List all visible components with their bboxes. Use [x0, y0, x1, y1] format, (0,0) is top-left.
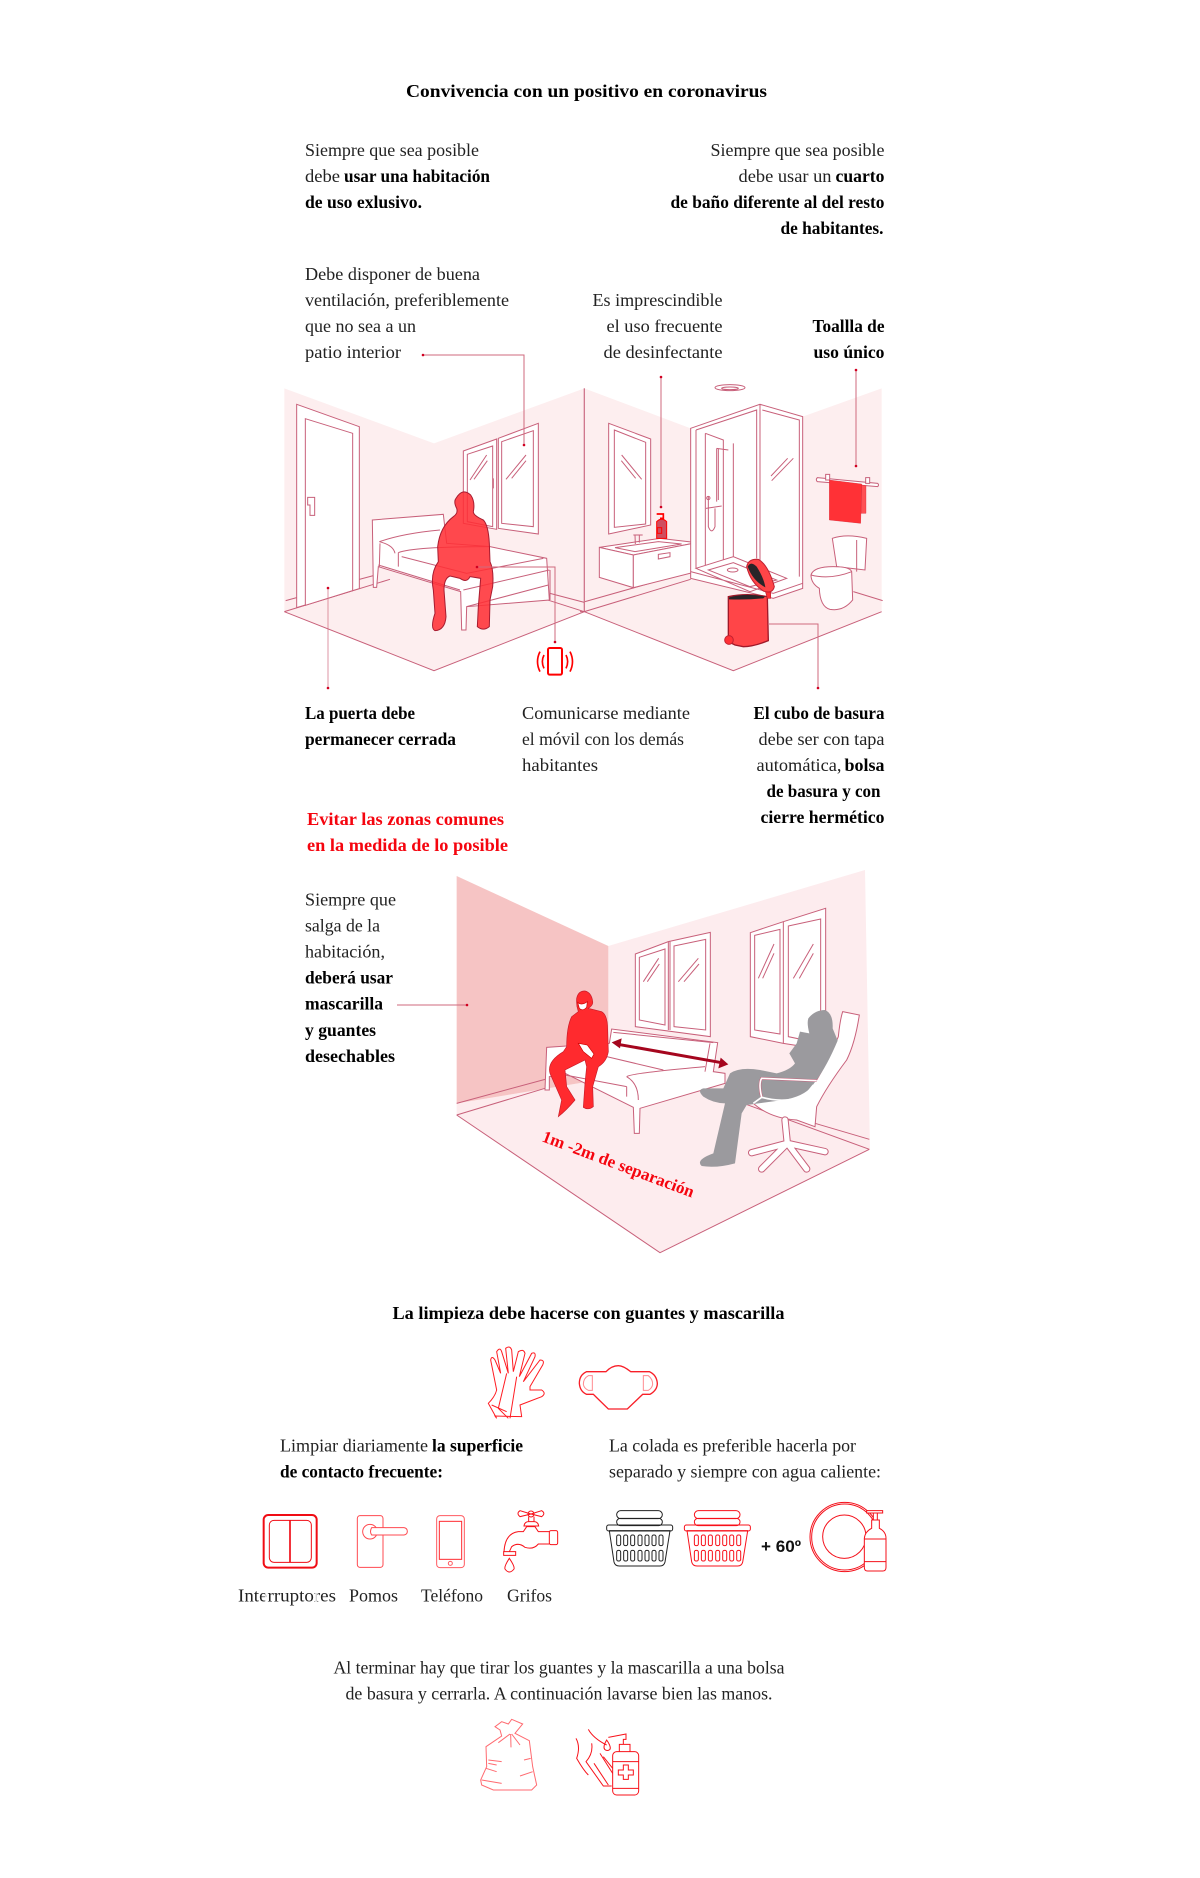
text: mascarilla y guantes: desechables: [305, 1046, 395, 1066]
leader: mascarilla: [397, 1004, 468, 1006]
leader: puerta: [327, 587, 329, 689]
leader: desinfectante: [660, 376, 662, 508]
text: 60 degrees: + 60º: [761, 1537, 801, 1556]
text: puerta cerrada: permanecer cerrada: [305, 729, 456, 749]
text: habitación de uso exclusivo: Siempre que sea posible: [305, 140, 479, 160]
text: colada: La colada es preferible hacerla por: [609, 1436, 856, 1456]
soap bottle: [657, 514, 667, 538]
text: cubo de basura: automática,: [756, 755, 842, 775]
towel rail and towel: [816, 474, 878, 523]
icon: plate and dish soap: [810, 1502, 886, 1572]
text: mascarilla y guantes: Siempre que: [305, 890, 396, 910]
distance arrow: [612, 1038, 728, 1068]
text: mascarilla y guantes: mascarilla: [305, 994, 383, 1014]
labels: surfaces: Interruptores: [238, 1586, 336, 1606]
red heading: evitar zonas comunes: en la medida de lo posible: [307, 835, 508, 855]
text: habitación de uso exclusivo: de uso exlusivo.: [305, 192, 422, 212]
labels: surfaces: Pomos: [349, 1586, 398, 1606]
icon: switch: [264, 1515, 317, 1568]
text: comunicarse mediante el móvil: habitantes: [522, 755, 598, 775]
icon: laundry basket red: [684, 1511, 750, 1566]
text: cubo de basura: debe ser con tapa: [758, 729, 885, 749]
sofa: [545, 1029, 725, 1133]
labels: surfaces: Grifos: [507, 1586, 552, 1606]
distance label: 1m -2m de separación: [540, 1127, 697, 1202]
text: cuarto de baño diferente: de baño diferente al del resto: [670, 192, 884, 212]
text: ventilación: que no sea a un: [305, 316, 416, 336]
person grey: [700, 1010, 838, 1167]
heading: limpieza: La limpieza debe hacerse con guantes y mascarilla: [392, 1303, 784, 1323]
text: mascarilla y guantes: deberá usar: [305, 968, 393, 988]
text: mascarilla y guantes: y guantes: [305, 1020, 376, 1040]
text: cubo de basura: [754, 703, 885, 827]
person sitting: [432, 492, 493, 631]
text: comunicarse mediante el móvil: el móvil con los demás: [522, 729, 684, 749]
toilet: [811, 536, 867, 610]
text: cuarto de baño diferente: debe usar un: [738, 166, 832, 186]
text: mascarilla y guantes: [305, 890, 396, 1066]
text: superficies de contacto: de contacto frecuente:: [280, 1462, 443, 1482]
text: cuarto de baño diferente: Siempre que sea posible: [710, 140, 884, 160]
text: toalla de uso único: Toallla de: [812, 316, 885, 336]
mirror: [609, 423, 651, 534]
text: toalla de uso único: uso único: [814, 342, 884, 362]
labels: surfaces: [238, 1570, 552, 1616]
icon: mask: [579, 1366, 657, 1409]
red heading: evitar zonas comunes: Evitar las zonas comunes: [307, 809, 504, 829]
window 2: [750, 908, 826, 1050]
person with mask: [549, 991, 608, 1117]
text: toalla de uso único: [812, 316, 885, 362]
text: habitación de uso exclusivo: usar una habitación: [344, 166, 490, 186]
red heading: evitar zonas comunes: [307, 809, 508, 855]
labels: surfaces: Teléfono: [421, 1586, 483, 1606]
window: [463, 423, 538, 534]
illustration: bedroom: [284, 388, 584, 675]
text: puerta cerrada: La puerta debe: [305, 703, 415, 723]
icon: door handle: [357, 1516, 407, 1567]
text: ventilación: [305, 264, 509, 362]
illustration: living room: [457, 870, 870, 1253]
bed: [372, 514, 550, 630]
text: cubo de basura: de basura y con: [766, 781, 880, 801]
text: superficies de contacto: Limpiar diariamente: [280, 1436, 428, 1456]
text: cuarto de baño diferente: de habitantes.: [780, 218, 884, 238]
text: cuarto de baño diferente: [670, 140, 884, 238]
text: al terminar: [334, 1658, 785, 1704]
text: desinfectante: Es imprescindible: [592, 290, 722, 310]
text: mascarilla y guantes: habitación,: [305, 942, 385, 962]
icon: phone: [437, 1516, 464, 1568]
text: habitación de uso exclusivo: [305, 140, 490, 212]
text: ventilación: patio interior: [305, 342, 401, 362]
icon: trash bag: [481, 1719, 537, 1790]
shower: [691, 404, 803, 598]
window 1: [635, 932, 710, 1037]
text: cubo de basura: cierre hermético: [760, 807, 884, 827]
icon: gloves: [488, 1347, 544, 1418]
icon: hand sanitizer: [576, 1729, 639, 1795]
text: al terminar: Al terminar hay que tirar los guantes y la mascarilla a una bolsa: [334, 1658, 785, 1678]
text: desinfectante: [592, 290, 723, 362]
text: colada: [609, 1436, 881, 1482]
text: superficies de contacto: la superficie: [432, 1436, 523, 1456]
text: cuarto de baño diferente: cuarto: [836, 166, 884, 186]
text: mascarilla y guantes: salga de la: [305, 916, 380, 936]
text: ventilación: ventilación, preferiblemente: [305, 290, 509, 310]
text: colada: separado y siempre con agua caliente:: [609, 1462, 881, 1482]
illustration: bathroom: [580, 385, 883, 671]
leader: toalla: [855, 369, 857, 467]
text: superficies de contacto: [280, 1436, 523, 1482]
text: puerta cerrada: [305, 703, 456, 749]
trash bin: [725, 559, 774, 647]
icon: tap: [504, 1511, 558, 1572]
text: al terminar: de basura y cerrarla. A continuación lavarse bien las manos.: [346, 1684, 772, 1704]
leader: cubo de basura: [768, 624, 819, 689]
leader: ventilación: [422, 354, 525, 446]
leader: móvil: [476, 566, 556, 643]
sink: [599, 535, 697, 588]
text: habitación de uso exclusivo: debe: [305, 166, 340, 186]
title: Convivencia con un positivo en coronavirus: [406, 81, 767, 101]
text: comunicarse mediante el móvil: [522, 703, 690, 775]
text: comunicarse mediante el móvil: Comunicarse mediante: [522, 703, 690, 723]
icon: laundry basket black: [607, 1511, 673, 1566]
text: cubo de basura: bolsa: [844, 755, 884, 775]
office chair: [752, 1012, 859, 1169]
ventilation: [715, 385, 745, 391]
door: [297, 404, 359, 608]
text: cubo de basura: El cubo de basura: [754, 703, 884, 723]
text: desinfectante: el uso frecuente: [606, 316, 722, 336]
phone icon: [537, 648, 572, 675]
text: ventilación: Debe disponer de buena: [305, 264, 480, 284]
text: desinfectante: de desinfectante: [604, 342, 723, 362]
